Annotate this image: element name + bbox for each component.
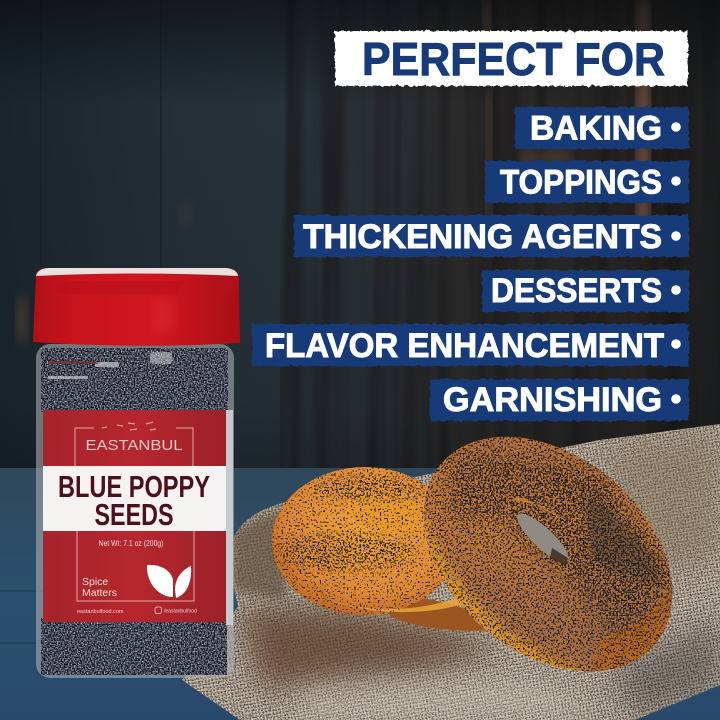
item: desserts: DESSERTS — [491, 272, 662, 310]
bagel hole — [511, 507, 575, 569]
website: eastanbulfood.com — [77, 609, 124, 615]
icon: leaves — [147, 565, 191, 598]
item: baking — [515, 107, 689, 149]
tagline: Spice — [82, 576, 108, 588]
white title band — [43, 466, 226, 531]
item: garnishing: GARNISHING — [443, 381, 662, 419]
jar of blue poppy seeds — [33, 268, 240, 678]
burlap cloth — [180, 420, 720, 720]
poppy seeds, upper — [41, 348, 228, 412]
item: thickening agents: THICKENING AGENTS — [303, 218, 662, 256]
jar body — [36, 344, 234, 678]
brand name: EASTANBUL — [86, 437, 182, 454]
item: toppings: TOPPINGS — [500, 164, 662, 202]
front bagel with poppy seeds — [424, 436, 672, 672]
heading: perfect for: PERFECT FOR — [362, 33, 665, 85]
poppy seeds, lower — [41, 618, 227, 675]
item: flavor enhancement: FLAVOR ENHANCEMENT — [265, 327, 664, 365]
red lid — [33, 268, 240, 346]
net weight: Net Wt: 7.1 oz (200g) — [98, 538, 164, 548]
blue wooden table — [0, 468, 720, 720]
icon: instagram — [155, 607, 162, 614]
brand box — [75, 428, 194, 601]
list: uses — [252, 107, 689, 421]
product name — [58, 469, 210, 532]
birds — [102, 422, 156, 430]
red product label — [43, 410, 226, 622]
wooden wall background — [0, 0, 720, 475]
red product label: Matters — [82, 587, 117, 599]
social handle: /eastanbulfood — [164, 608, 197, 614]
product name: BLUE POPPY — [58, 469, 210, 504]
item: baking: BAKING — [530, 110, 662, 148]
back bagel — [270, 467, 486, 631]
product name: SEEDS — [94, 497, 174, 532]
